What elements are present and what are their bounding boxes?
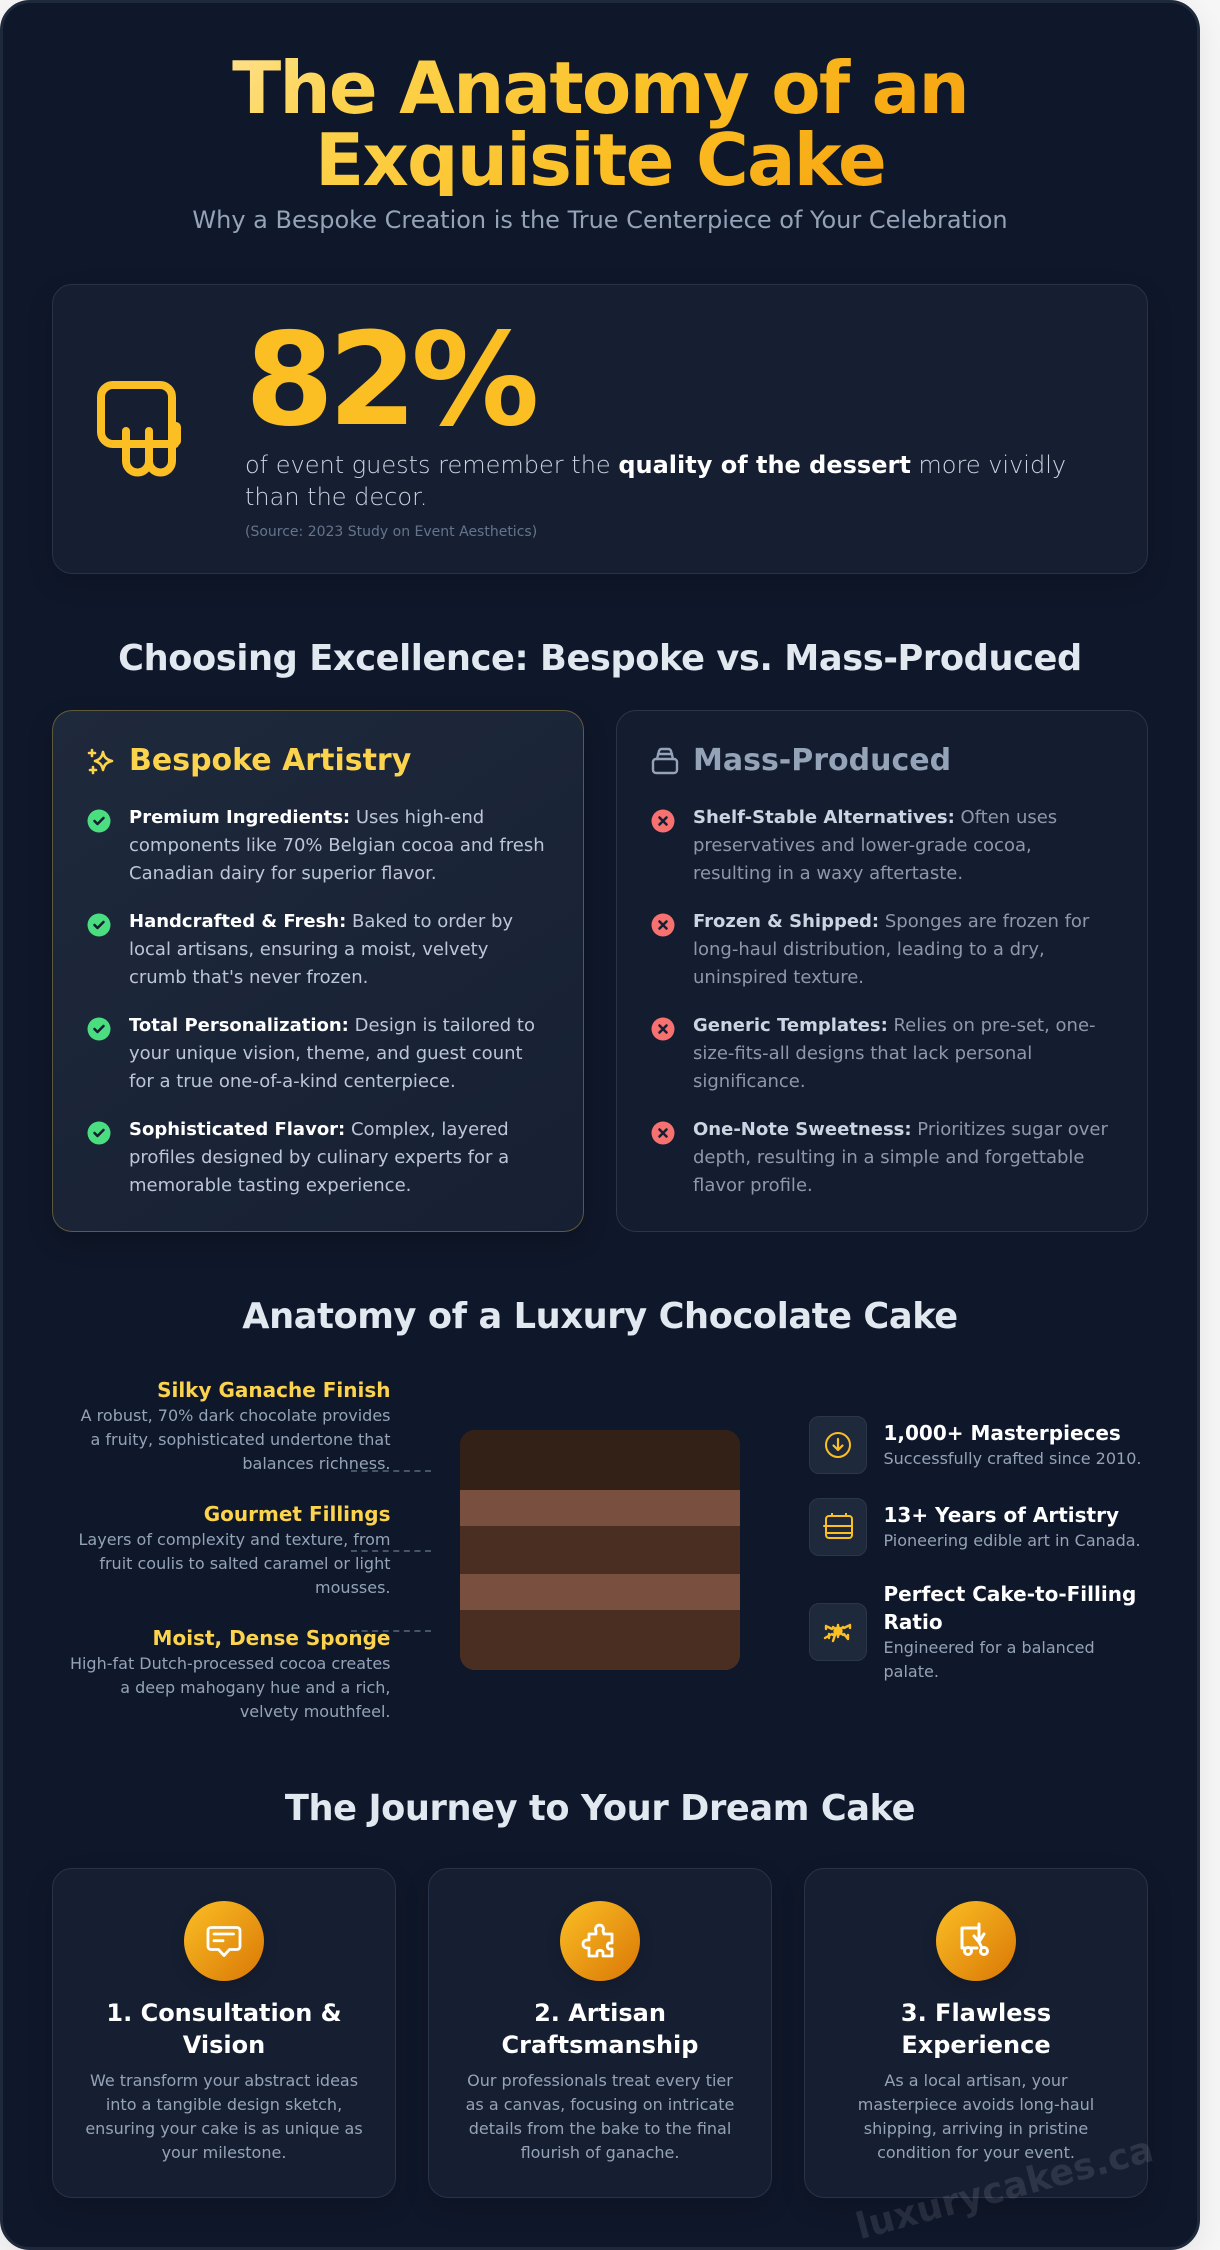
- step card: delivery: [804, 1868, 1148, 2198]
- step card: consultation: [52, 1868, 396, 2198]
- text: [693, 1119, 1108, 1196]
- label: sponge: High-fat Dutch-processed cocoa creates: [70, 1654, 390, 1673]
- text: [129, 1015, 535, 1092]
- layer: ganache: [460, 1430, 740, 1490]
- step heading: Experience: [901, 2031, 1051, 2059]
- text: significance.: [693, 1071, 806, 1092]
- text: uninspired texture.: [693, 967, 864, 988]
- layer: filling top: [460, 1490, 740, 1526]
- text: depth, resulting in a simple and forgettable: [693, 1147, 1084, 1168]
- text: components like 70% Belgian cocoa and fresh: [129, 835, 545, 856]
- text: [693, 911, 1090, 988]
- stat: masterpieces: 1,000+ Masterpieces: [884, 1421, 1121, 1445]
- icon: check: [88, 810, 110, 832]
- text: Handcrafted & Fresh: Baked to order by: [129, 911, 513, 932]
- text: Shelf-Stable Alternatives: Often uses: [693, 807, 1057, 828]
- item: handcrafted: [88, 911, 513, 988]
- item: flavor: [88, 1119, 509, 1196]
- text: One-Note Sweetness: Prioritizes sugar over: [693, 1119, 1108, 1140]
- icon: cross: [652, 914, 674, 936]
- icon: chat: [184, 1901, 264, 1981]
- step text: your milestone.: [162, 2143, 286, 2162]
- stat: masterpieces: Successfully crafted since 2010.: [884, 1449, 1141, 1468]
- step heading: 2. Artisan: [534, 1999, 666, 2027]
- text: [693, 807, 1057, 884]
- label: fillings: Layers of complexity and texture, from: [78, 1530, 390, 1549]
- statistic description: than the decor.: [245, 482, 427, 510]
- text: preservatives and lower-grade cocoa,: [693, 835, 1032, 856]
- mass-produced heading: Mass-Produced: [693, 743, 951, 778]
- icon: box stack: [652, 748, 678, 774]
- label: ganache: balances richness.: [242, 1454, 390, 1473]
- text: memorable tasting experience.: [129, 1175, 411, 1196]
- stat icon box: download: [809, 1416, 867, 1474]
- item: templates: [652, 1015, 1096, 1092]
- text: [129, 807, 545, 884]
- icon: sparkles: [88, 748, 114, 774]
- layer: sponge middle: [460, 1526, 740, 1574]
- icon: check: [88, 914, 110, 936]
- text: resulting in a waxy aftertaste.: [693, 863, 963, 884]
- text: Premium Ingredients: Uses high-end: [129, 807, 484, 828]
- step text: As a local artisan, your: [884, 2071, 1068, 2090]
- label: ganache: a fruity, sophisticated undertone that: [91, 1430, 390, 1449]
- icon: cross: [652, 1122, 674, 1144]
- step text: flourish of ganache.: [521, 2143, 679, 2162]
- text: Generic Templates: Relies on pre-set, one-: [693, 1015, 1096, 1036]
- item: frozen: [652, 911, 1090, 988]
- text: Frozen & Shipped: Sponges are frozen for: [693, 911, 1089, 932]
- label: sponge: Moist, Dense Sponge: [153, 1626, 390, 1650]
- step heading: [502, 1999, 698, 2059]
- bespoke heading: Bespoke Artistry: [129, 743, 411, 778]
- label: ganache: A robust, 70% dark chocolate provides: [81, 1406, 390, 1425]
- step text: ensuring your cake is as unique as: [85, 2119, 363, 2138]
- step card: craftsmanship: [428, 1868, 772, 2198]
- layer: sponge bottom: [460, 1610, 740, 1670]
- stat: years: [884, 1503, 1141, 1550]
- label: sponge: [70, 1626, 390, 1721]
- icon: check: [88, 1122, 110, 1144]
- step text: [466, 2071, 734, 2162]
- item: shelf-stable: [652, 807, 1057, 884]
- subtitle: Why a Bespoke Creation is the True Centerpiece of Your Celebration: [192, 206, 1008, 234]
- text: size-fits-all designs that lack personal: [693, 1043, 1032, 1064]
- label: sponge: a deep mahogany hue and a rich,: [120, 1678, 390, 1697]
- label: fillings: [78, 1502, 390, 1597]
- step heading: 1. Consultation &: [106, 1999, 342, 2027]
- label: ganache: [80, 1378, 390, 1473]
- title: Exquisite Cake: [315, 118, 885, 202]
- step text: condition for your event.: [877, 2143, 1075, 2162]
- stat: ratio: Ratio: [884, 1610, 943, 1634]
- text: for a true one-of-a-kind centerpiece.: [129, 1071, 456, 1092]
- icon: check: [88, 1018, 110, 1040]
- step text: as a canvas, focusing on intricate: [466, 2095, 734, 2114]
- text: profiles designed by culinary experts for a: [129, 1147, 509, 1168]
- text: [129, 911, 513, 988]
- label: sponge: velvety mouthfeel.: [240, 1702, 390, 1721]
- statistic description: of event guests remember the quality of the dessert more vividly: [245, 451, 1066, 479]
- text: your unique vision, theme, and guest count: [129, 1043, 523, 1064]
- text: local artisans, ensuring a moist, velvety: [129, 939, 488, 960]
- step text: into a tangible design sketch,: [106, 2095, 342, 2114]
- label: fillings: fruit coulis to salted caramel or light: [99, 1554, 390, 1573]
- heading: anatomy: Anatomy of a Luxury Chocolate Cake: [242, 1296, 958, 1337]
- icon: cake hero: [97, 381, 181, 476]
- label: fillings: mousses.: [315, 1578, 390, 1597]
- panel: hero statistic: [52, 284, 1148, 574]
- stat: years: 13+ Years of Artistry: [884, 1503, 1119, 1527]
- stat: ratio: palate.: [884, 1662, 939, 1681]
- text: Total Personalization: Design is tailored to: [129, 1015, 535, 1036]
- step text: Our professionals treat every tier: [467, 2071, 733, 2090]
- label: ganache: Silky Ganache Finish: [157, 1378, 390, 1402]
- stat: ratio: Perfect Cake-to-Filling: [884, 1582, 1136, 1606]
- icon: puzzle: [560, 1901, 640, 1981]
- connector: ganache: [351, 1470, 431, 1472]
- icon: cross: [652, 810, 674, 832]
- stat icon box: calendar: [809, 1498, 867, 1556]
- stat icon box: ratio: [809, 1603, 867, 1661]
- step text: [85, 2071, 363, 2162]
- title: [232, 46, 968, 202]
- stat: years: Pioneering edible art in Canada.: [884, 1531, 1141, 1550]
- text: crumb that's never frozen.: [129, 967, 368, 988]
- icon: cross: [652, 1018, 674, 1040]
- item: premium ingredients: [88, 807, 545, 884]
- panel: mass-produced: [616, 710, 1148, 1232]
- panel: bespoke artistry: [52, 710, 584, 1232]
- statistic description: [245, 451, 1066, 510]
- connector: sponge: [351, 1630, 431, 1632]
- stat: ratio: [884, 1582, 1136, 1681]
- item: personalization: [88, 1015, 535, 1092]
- text: long-haul distribution, leading to a dry,: [693, 939, 1045, 960]
- heading: journey: The Journey to Your Dream Cake: [285, 1788, 915, 1829]
- text: [693, 1015, 1096, 1092]
- label: fillings: Gourmet Fillings: [204, 1502, 390, 1526]
- step text: [805, 2069, 1147, 2165]
- text: [129, 1119, 509, 1196]
- step heading: 3. Flawless: [901, 1999, 1051, 2027]
- big number 82%: 82%: [245, 306, 533, 455]
- step heading: Vision: [183, 2031, 265, 2059]
- stat: masterpieces: [884, 1421, 1141, 1468]
- text: flavor profile.: [693, 1175, 813, 1196]
- cake diagram: [460, 1430, 740, 1670]
- stat: ratio: Engineered for a balanced: [884, 1638, 1095, 1657]
- item: sweetness: [652, 1119, 1108, 1196]
- title: The Anatomy of an: [232, 46, 968, 130]
- text: Canadian dairy for superior flavor.: [129, 863, 437, 884]
- step heading: [106, 1999, 342, 2059]
- step text: masterpiece avoids long-haul: [858, 2095, 1094, 2114]
- step text: details from the bake to the final: [469, 2119, 731, 2138]
- step heading: [901, 1999, 1051, 2059]
- layer: filling bottom: [460, 1574, 740, 1610]
- connector: fillings: [351, 1550, 431, 1552]
- step heading: Craftsmanship: [502, 2031, 698, 2059]
- icon: delivery: [936, 1901, 1016, 1981]
- statistic source: (Source: 2023 Study on Event Aesthetics): [245, 524, 537, 540]
- watermark: luxurycakes.ca: [852, 2129, 1158, 2248]
- step text: We transform your abstract ideas: [90, 2071, 358, 2090]
- text: Sophisticated Flavor: Complex, layered: [129, 1119, 509, 1140]
- heading: comparison: Choosing Excellence: Bespoke vs. Mass-Produced: [118, 638, 1082, 679]
- step text: shipping, arriving in pristine: [864, 2119, 1088, 2138]
